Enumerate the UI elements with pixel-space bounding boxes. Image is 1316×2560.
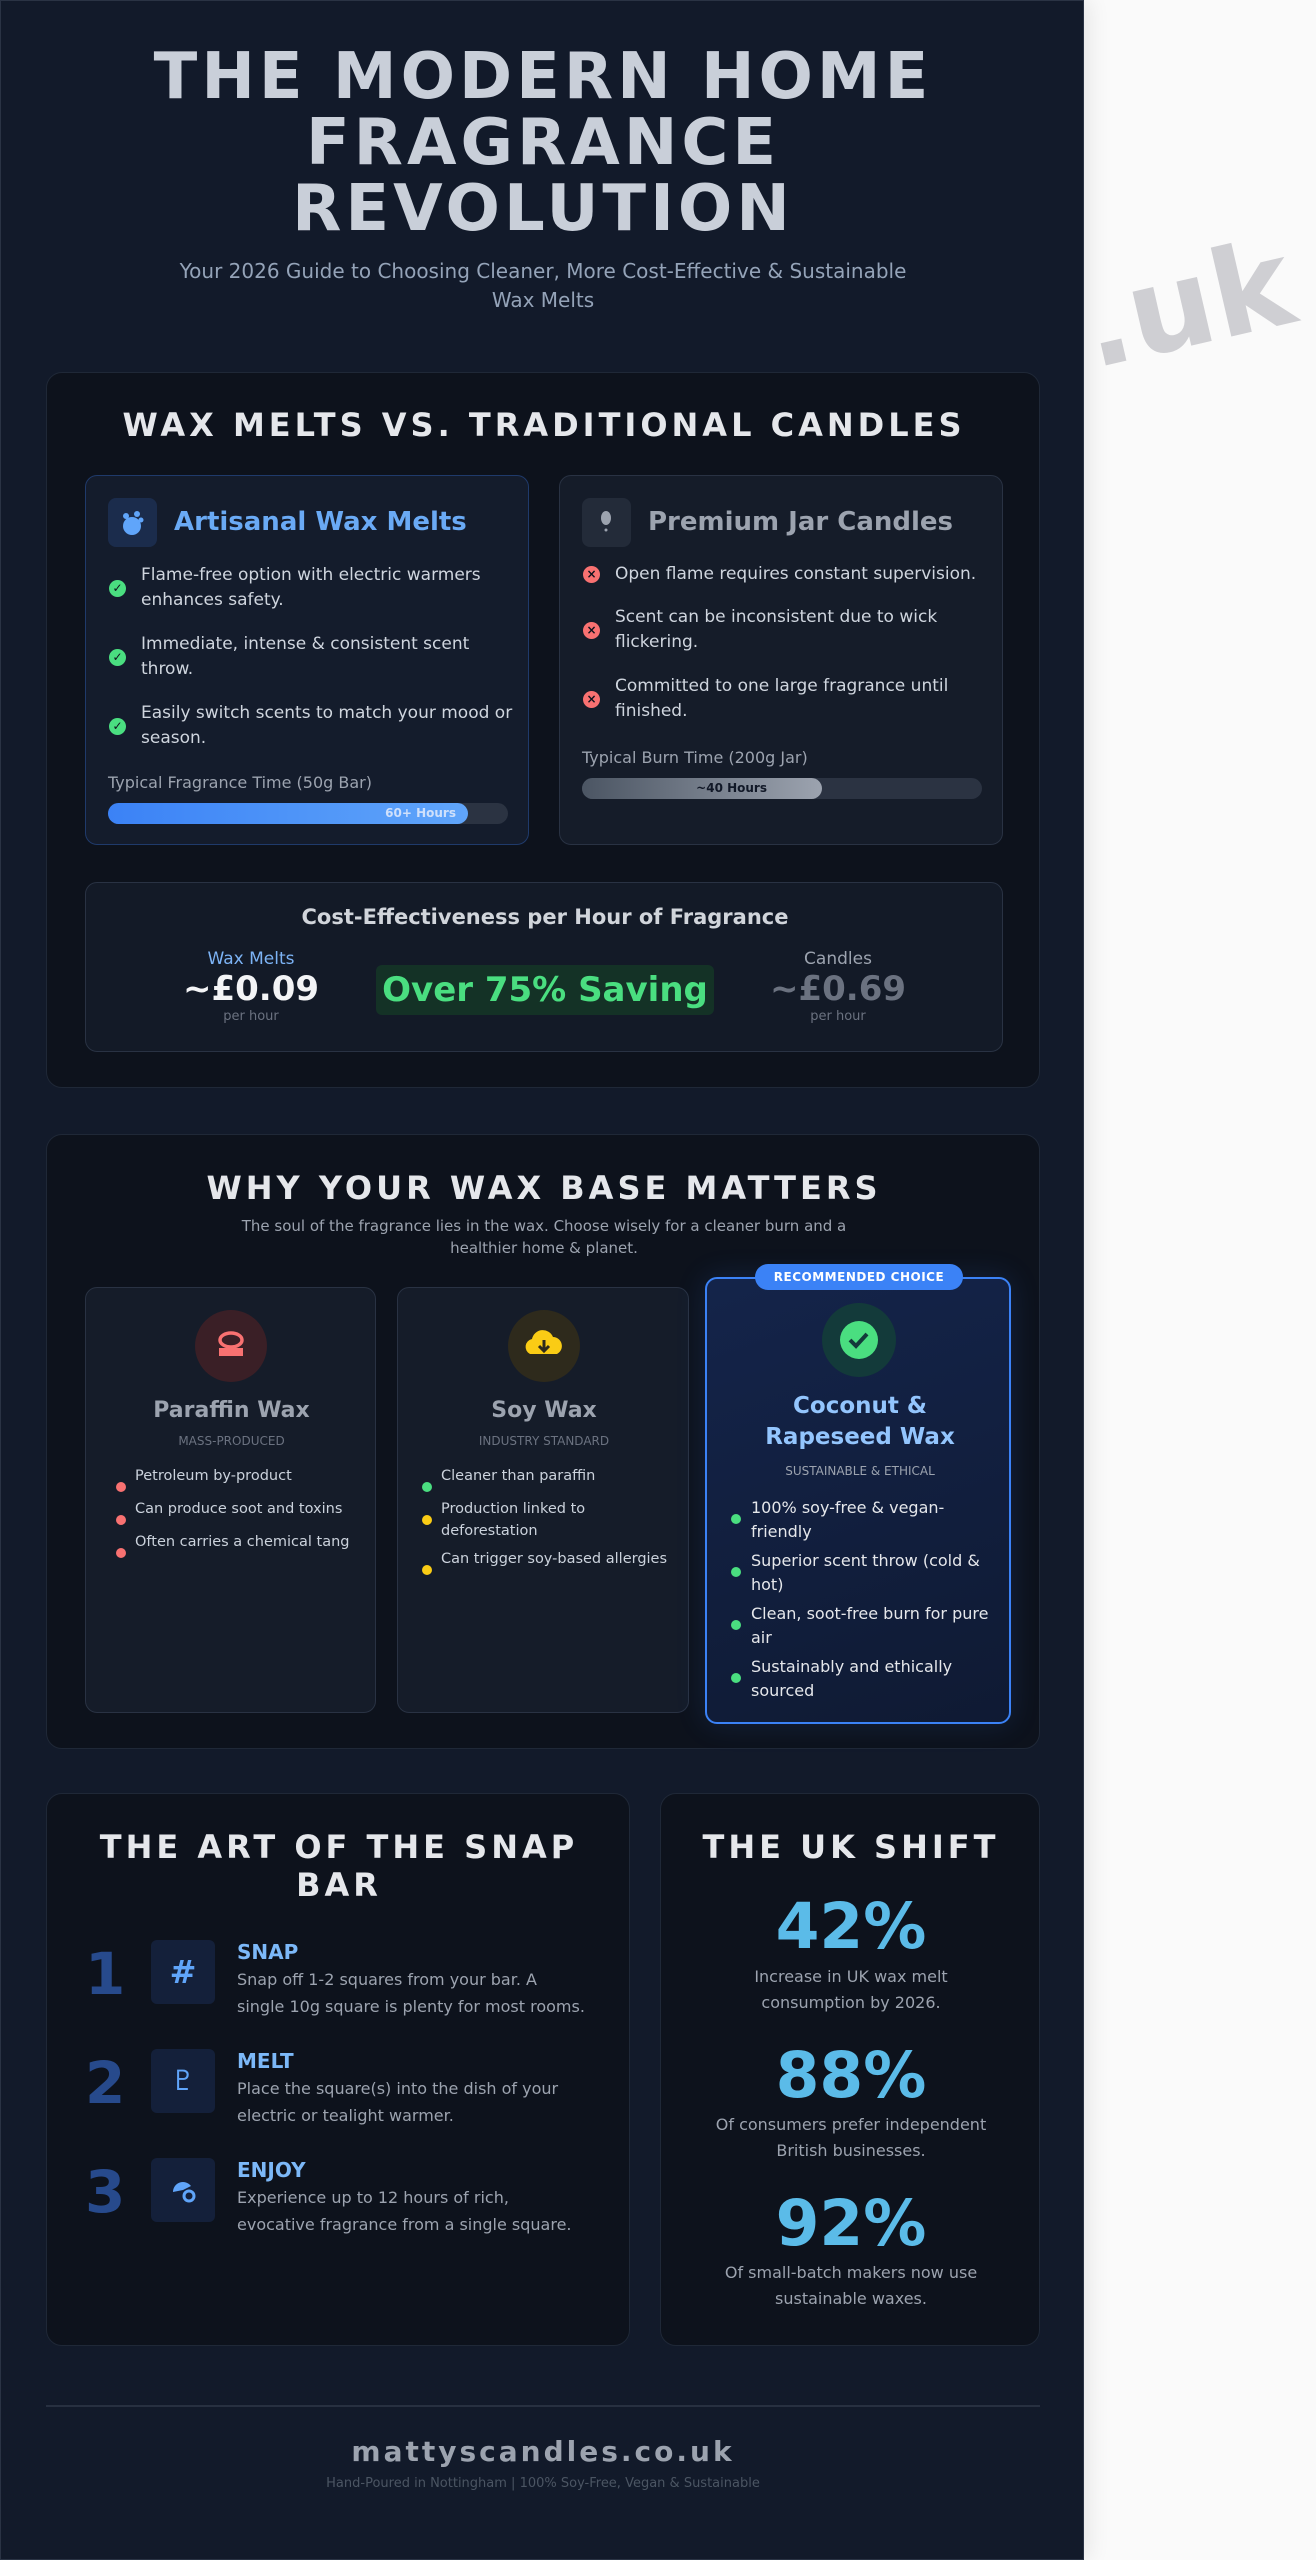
bullets — [731, 1498, 988, 1700]
heading: THE UK SHIFT — [703, 1828, 999, 1866]
wax melts cost — [183, 949, 319, 1024]
card: paraffin: Petroleum by-product — [135, 1468, 292, 1484]
icon: melt: ♇ — [170, 2064, 196, 2097]
step 3: 3 — [85, 2158, 125, 2226]
step 3: ENJOY — [237, 2158, 306, 2182]
bar: burn time — [582, 748, 982, 799]
step 3 — [85, 2158, 572, 2234]
footer: mattyscandles.co.uk — [351, 2435, 735, 2468]
card: paraffin: MASS-PRODUCED — [178, 1434, 285, 1448]
card: soy: INDUSTRY STANDARD — [479, 1434, 609, 1448]
bar: burn time: Typical Burn Time (200g Jar) — [582, 748, 808, 767]
card: wax melts: Flame-free option with electric warmers enhances safety. — [141, 565, 481, 610]
card title: Artisanal Wax Melts — [174, 507, 467, 537]
card: paraffin: Can produce soot and toxins — [135, 1501, 342, 1517]
name: Soy Wax — [491, 1398, 597, 1423]
heading: THE ART OF THE SNAP — [100, 1828, 578, 1866]
name: Coconut & — [793, 1393, 927, 1419]
name: Paraffin Wax — [153, 1398, 310, 1423]
card: candles: Open flame requires constant supervision. — [615, 564, 976, 584]
step 1: Snap off 1-2 squares from your bar. A single 10g square is plenty for most rooms. — [237, 1970, 585, 2016]
icon — [195, 1310, 267, 1382]
stat 42: 42% — [776, 1890, 926, 1963]
step 1 — [85, 1940, 585, 2016]
wax melts cost: Wax Melts — [208, 949, 294, 969]
candles cost: Candles — [804, 949, 872, 969]
title: THE MODERN HOME — [154, 40, 932, 114]
cost title: Cost-Effectiveness per Hour of Fragrance — [302, 905, 788, 929]
card: candles: Committed to one large fragrance until finished. — [615, 676, 948, 721]
heading: WAX MELTS VS. TRADITIONAL CANDLES — [123, 406, 965, 444]
icon: enjoy — [151, 2158, 215, 2222]
card: soy: Cleaner than paraffin — [441, 1468, 595, 1484]
bar: fragrance time — [108, 773, 508, 824]
title: REVOLUTION — [292, 172, 794, 246]
bar: burn time: ~40 Hours — [696, 781, 767, 795]
heading: WHY YOUR WAX BASE MATTERS — [206, 1169, 882, 1207]
card: wax melts: Immediate, intense & consistent scent throw. — [141, 634, 469, 679]
card: candles: × — [586, 623, 597, 637]
list — [583, 564, 976, 721]
footer — [326, 2435, 760, 2491]
name — [765, 1393, 955, 1450]
panel: wax melts vs candles — [46, 372, 1040, 1088]
icon: grid: # — [170, 1953, 196, 1991]
cost box — [85, 882, 1003, 1052]
card: candles: × — [586, 567, 597, 581]
step 2: Place the square(s) into the dish of your electric or tealight warmer. — [237, 2079, 558, 2125]
saving pill: Over 75% Saving — [382, 970, 708, 1010]
bullets — [422, 1468, 667, 1575]
icon: candle — [582, 498, 631, 547]
card: wax melts: ✓ — [112, 719, 123, 733]
card: coconut & rapeseed: Sustainably and ethically sourced — [751, 1657, 952, 1700]
bullets — [116, 1468, 350, 1558]
list — [109, 565, 512, 748]
badge — [755, 1264, 963, 1290]
icon: melt — [151, 2049, 215, 2113]
card: soy: Production linked to deforestation — [441, 1501, 585, 1539]
panel: UK shift: Of consumers prefer independent British businesses. — [716, 2115, 986, 2160]
bar: fragrance time: Typical Fragrance Time (50g Bar) — [108, 773, 372, 792]
panel: snap bar — [46, 1793, 630, 2346]
footer: Hand-Poured in Nottingham | 100% Soy-Free, Vegan & Sustainable — [326, 2476, 760, 2491]
wax melts cost: ~£0.09 — [183, 969, 319, 1009]
name: Rapeseed Wax — [765, 1424, 955, 1450]
step 1: 1 — [85, 1940, 125, 2008]
panel: UK shift: Of small-batch makers now use sustainable waxes. — [725, 2263, 977, 2308]
step 3: Experience up to 12 hours of rich, evocative fragrance from a single square. — [237, 2188, 572, 2234]
icon — [508, 1310, 580, 1382]
card: coconut & rapeseed: SUSTAINABLE & ETHICAL — [785, 1464, 935, 1478]
card: candles — [559, 475, 1003, 845]
icon: check — [822, 1303, 896, 1377]
card: candles: Scent can be inconsistent due to wick flickering. — [615, 607, 937, 652]
step 2: 2 — [85, 2049, 125, 2117]
wax melts cost: per hour — [223, 1009, 279, 1024]
card: soy: Can trigger soy-based allergies — [441, 1551, 667, 1567]
icon: wax melt — [108, 498, 157, 547]
candles cost — [770, 949, 906, 1024]
title: FRAGRANCE — [306, 106, 780, 180]
icon: grid — [151, 1940, 215, 2004]
heading — [100, 1828, 578, 1904]
title — [154, 40, 932, 246]
card: wax melts: ✓ — [112, 650, 123, 664]
intro text: The soul of the fragrance lies in the wax. Choose wisely for a cleaner burn and a healthier home & planet. — [242, 1217, 846, 1257]
heading: BAR — [296, 1866, 382, 1904]
card: paraffin: Often carries a chemical tang — [135, 1534, 350, 1550]
panel: UK shift: Increase in UK wax melt consumption by 2026. — [754, 1967, 948, 2012]
stat 92: 92% — [776, 2187, 926, 2260]
card: wax melts: Easily switch scents to match your mood or season. — [141, 703, 512, 748]
card: coconut & rapeseed — [705, 1277, 1011, 1724]
card: wax melts: ✓ — [112, 581, 123, 595]
step 2: MELT — [237, 2049, 294, 2073]
step 1: SNAP — [237, 1940, 298, 1964]
panel: wax base — [46, 1134, 1040, 1749]
card: soy — [397, 1287, 689, 1713]
card: candles: × — [586, 692, 597, 706]
card: paraffin — [85, 1287, 376, 1713]
step 2 — [85, 2049, 558, 2125]
card: wax melts — [85, 475, 529, 845]
panel: UK shift — [660, 1793, 1040, 2346]
stat 88: 88% — [776, 2039, 926, 2112]
bar: fragrance time: 60+ Hours — [385, 806, 456, 820]
card: coconut & rapeseed: Clean, soot-free burn for pure air — [751, 1604, 988, 1647]
card: coconut & rapeseed: Superior scent throw (cold & hot) — [751, 1551, 980, 1594]
card title: Premium Jar Candles — [648, 507, 953, 537]
card: coconut & rapeseed: 100% soy-free & vegan-friendly — [751, 1498, 944, 1541]
badge: RECOMMENDED CHOICE — [774, 1270, 944, 1284]
candles cost: per hour — [810, 1009, 866, 1024]
candles cost: ~£0.69 — [770, 969, 906, 1009]
subtitle: Your 2026 Guide to Choosing Cleaner, More Cost-Effective & Sustainable Wax Melts — [180, 259, 906, 312]
